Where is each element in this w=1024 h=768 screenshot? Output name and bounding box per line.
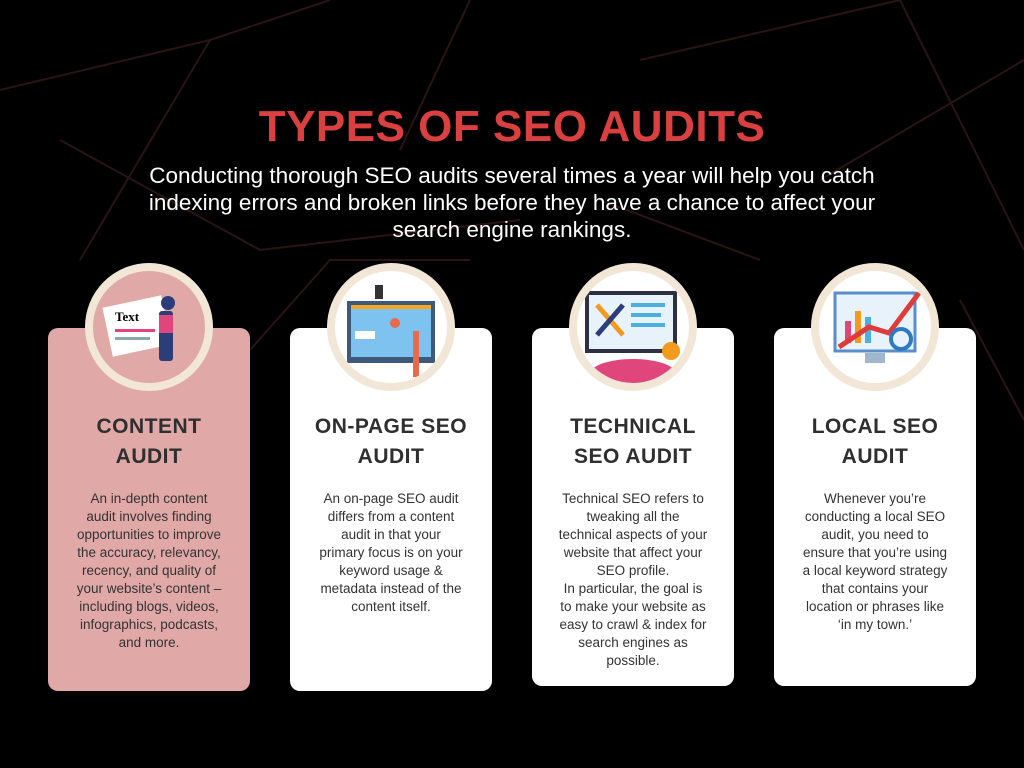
text: on-page: keyword usage & <box>339 563 443 578</box>
text: on-page: primary focus is on your <box>319 545 463 560</box>
text: technical: search engines as <box>578 635 688 650</box>
heading: local <box>812 415 938 468</box>
heading: technical <box>570 415 696 468</box>
text: technical: website that affect your <box>564 545 702 560</box>
icon: on-page <box>327 263 455 391</box>
heading: on-page <box>315 415 467 468</box>
text: technical: SEO profile. <box>597 563 669 578</box>
text: technical <box>558 491 708 668</box>
text: local: Whenever you’re <box>824 491 926 506</box>
text: on-page: An on-page SEO audit <box>323 491 459 506</box>
heading: local: AUDIT <box>842 445 908 468</box>
heading: technical: TECHNICAL <box>570 415 696 438</box>
subtitle: Conducting thorough SEO audits several times a year will help you catch <box>149 163 875 188</box>
text: local: a local keyword strategy <box>803 563 947 578</box>
text: on-page <box>319 491 463 614</box>
subtitle: indexing errors and broken links before they have a chance to affect your <box>149 190 875 215</box>
icon: local <box>811 263 939 391</box>
panel: technical <box>532 328 734 686</box>
text: content audit <box>76 491 222 650</box>
text: content audit: infographics, podcasts, <box>80 617 218 632</box>
text: content audit: your website’s content – <box>77 581 221 596</box>
panel: local <box>774 328 976 686</box>
icon: technical <box>569 263 697 391</box>
text: on-page: content itself. <box>351 599 431 614</box>
text: local: ensure that you’re using <box>803 545 947 560</box>
text: local: audit, you need to <box>821 527 929 542</box>
text: technical: In particular, the goal is <box>564 581 702 596</box>
text: local: ‘in my town.’ <box>838 617 912 632</box>
text: local: that contains your <box>822 581 928 596</box>
text: local <box>803 491 948 632</box>
subtitle <box>149 163 875 242</box>
text: content audit: including blogs, videos, <box>79 599 219 614</box>
icon: content: Text <box>115 309 140 324</box>
heading: content audit <box>96 415 202 468</box>
text: local: location or phrases like <box>806 599 944 614</box>
heading: local: LOCAL SEO <box>812 415 938 438</box>
text: technical: tweaking all the <box>586 509 680 524</box>
text: content audit: opportunities to improve <box>77 527 221 542</box>
text: technical: possible. <box>606 653 660 668</box>
panel: on-page <box>290 328 492 691</box>
text: on-page: differs from a content <box>328 509 454 524</box>
heading: technical: SEO AUDIT <box>574 445 692 468</box>
text: technical: Technical SEO refers to <box>562 491 704 506</box>
icon: content <box>85 263 213 391</box>
heading: on-page: ON-PAGE SEO <box>315 415 467 438</box>
text: on-page: metadata instead of the <box>320 581 462 596</box>
heading: content audit: CONTENT <box>96 415 202 438</box>
panel: content audit <box>48 328 250 691</box>
text: on-page: audit in that your <box>341 527 441 542</box>
text: content audit: and more. <box>119 635 179 650</box>
text: local: conducting a local SEO <box>805 509 945 524</box>
heading: content audit: AUDIT <box>116 445 182 468</box>
text: technical: to make your website as <box>560 599 706 614</box>
title: TYPES OF SEO AUDITS <box>259 102 765 151</box>
text: technical: technical aspects of your <box>559 527 707 542</box>
text: technical: easy to crawl & index for <box>559 617 707 632</box>
text: content audit: An in-depth content <box>90 491 208 506</box>
text: content audit: audit involves finding <box>86 509 212 524</box>
text: content audit: recency, and quality of <box>82 563 216 578</box>
text: content audit: the accuracy, relevancy, <box>77 545 221 560</box>
heading: on-page: AUDIT <box>358 445 424 468</box>
subtitle: search engine rankings. <box>393 217 631 242</box>
